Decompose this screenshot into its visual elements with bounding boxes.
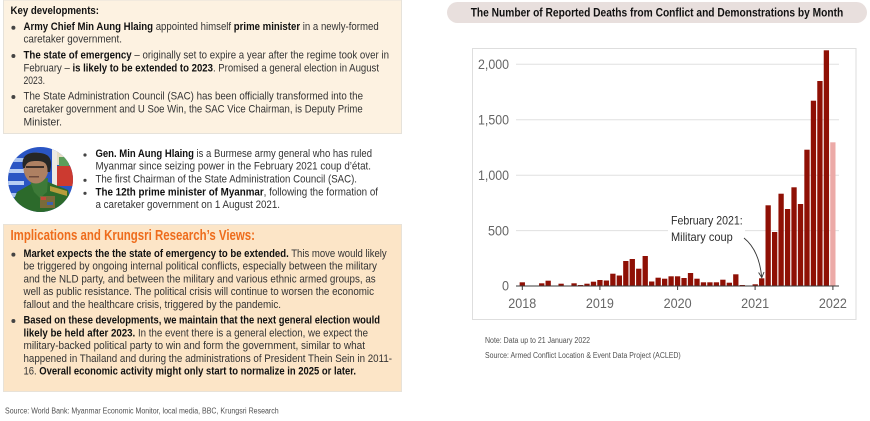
bullet text: state of emergency: February – is likely to be extended to 2023. Promised a general election in August — [24, 62, 379, 74]
panel: key developments — [4, 0, 402, 134]
bio text: Gen. Min Aung Hlaing — [83, 148, 379, 211]
bullet text: market expects: well as public resistance. The political crisis will continue to worsen the economic — [23, 286, 374, 298]
x axis with year labels: 2018 — [508, 296, 536, 311]
chart title pill — [447, 2, 867, 23]
bio text: Gen. Min Aung Hlaing: Myanmar since seizing power in the February 2021 coup d’état. — [96, 161, 371, 173]
bullet text: state administration council — [11, 91, 363, 128]
x axis with year labels — [508, 286, 847, 311]
x axis with year labels: 2021 — [741, 296, 769, 311]
bullet text: market expects: and the NLD party, and between the military and various ethnic armed groups, as — [24, 273, 376, 285]
bullet text: market expects — [11, 248, 387, 311]
bullet text: army chief: Army Chief Min Aung Hlaing appointed himself prime minister in a newly-formed — [24, 21, 379, 33]
chart source: Source: Armed Conflict Location & Event Data Project (ACLED) — [485, 351, 681, 360]
y axis gridlines and labels: 1,500 — [478, 112, 509, 127]
chart: reported deaths by month — [472, 48, 856, 320]
chart note: Note: Data up to 21 January 2022 — [485, 336, 590, 345]
bullet text: based on these developments: happened in Thailand and during the administrations of President Thein Sein in 2011- — [24, 353, 392, 365]
x axis with year labels: 2022 — [819, 296, 847, 311]
heading: key developments: Key developments: — [10, 5, 99, 17]
annotation: February 2021 military coup — [668, 212, 764, 278]
bio text: Gen. Min Aung Hlaing: The 12th prime minister of Myanmar, following the formation of — [96, 186, 379, 198]
bio text: Gen. Min Aung Hlaing: a caretaker government on 1 August 2021. — [96, 199, 280, 211]
bullet text: state administration council: The State Administration Council (SAC) has been officially transformed into the — [24, 91, 363, 103]
bullet text: based on these developments: Based on these developments, we maintain that the next general election would — [24, 315, 380, 327]
bullet text: based on these developments: likely be held after 2023. In the event there is a general election, we expect the — [24, 328, 368, 340]
bullet text: state administration council: caretaker government and U Soe Win, the SAC Vice Chairman, is Deputy Prime — [24, 104, 363, 116]
bullet text: market expects: be triggered by ongoing internal political conflicts, especially between the military — [24, 261, 377, 273]
y axis gridlines and labels: 0 — [502, 279, 509, 294]
bullet text: state of emergency: 2023. — [24, 75, 45, 87]
portrait: Gen. Min Aung Hlaing — [8, 147, 74, 214]
y axis gridlines and labels: 500 — [488, 223, 509, 238]
y axis gridlines and labels — [478, 57, 839, 294]
bullet text: based on these developments: military-backed political party to win and form the government, similar to what — [24, 340, 365, 352]
heading: implications: Implications and Krungsri Research’s Views: — [10, 228, 255, 244]
bullet text: army chief — [11, 21, 379, 46]
x axis with year labels: 2019 — [586, 296, 614, 311]
source note: left: Source: World Bank: Myanmar Economic Monitor, local media, BBC, Krungsri Research — [5, 406, 279, 415]
panel: implications and views — [4, 224, 402, 392]
bars: monthly deaths — [520, 50, 836, 286]
x axis with year labels: 2020 — [664, 296, 692, 311]
bullet text: army chief: caretaker government. — [24, 34, 122, 46]
bullet text: state of emergency — [11, 50, 389, 87]
annotation: February 2021 military coup: Military coup — [671, 230, 733, 244]
bullet text: based on these developments: 16. Overall economic activity might only start to normalize in 2025 or later. — [24, 366, 356, 378]
bullet text: state of emergency: The state of emergency – originally set to expire a year after the regime took over in — [24, 50, 389, 62]
bio text: Gen. Min Aung Hlaing: Gen. Min Aung Hlaing is a Burmese army general who has ruled — [96, 148, 372, 160]
annotation: February 2021 military coup: February 2021: — [671, 213, 743, 227]
bullet text: state administration council: Minister. — [24, 116, 62, 128]
bullet text: market expects: Market expects the the state of emergency to be extended. This move would likely — [24, 248, 387, 260]
bio text: Gen. Min Aung Hlaing: The first Chairman of the State Administration Council (SAC). — [96, 173, 357, 185]
bullet text: based on these developments — [11, 315, 392, 378]
y axis gridlines and labels: 2,000 — [478, 57, 509, 72]
bullet text: market expects: fallout and the healthcare crisis, triggered by the pandemic. — [24, 299, 281, 311]
y axis gridlines and labels: 1,000 — [478, 168, 509, 183]
